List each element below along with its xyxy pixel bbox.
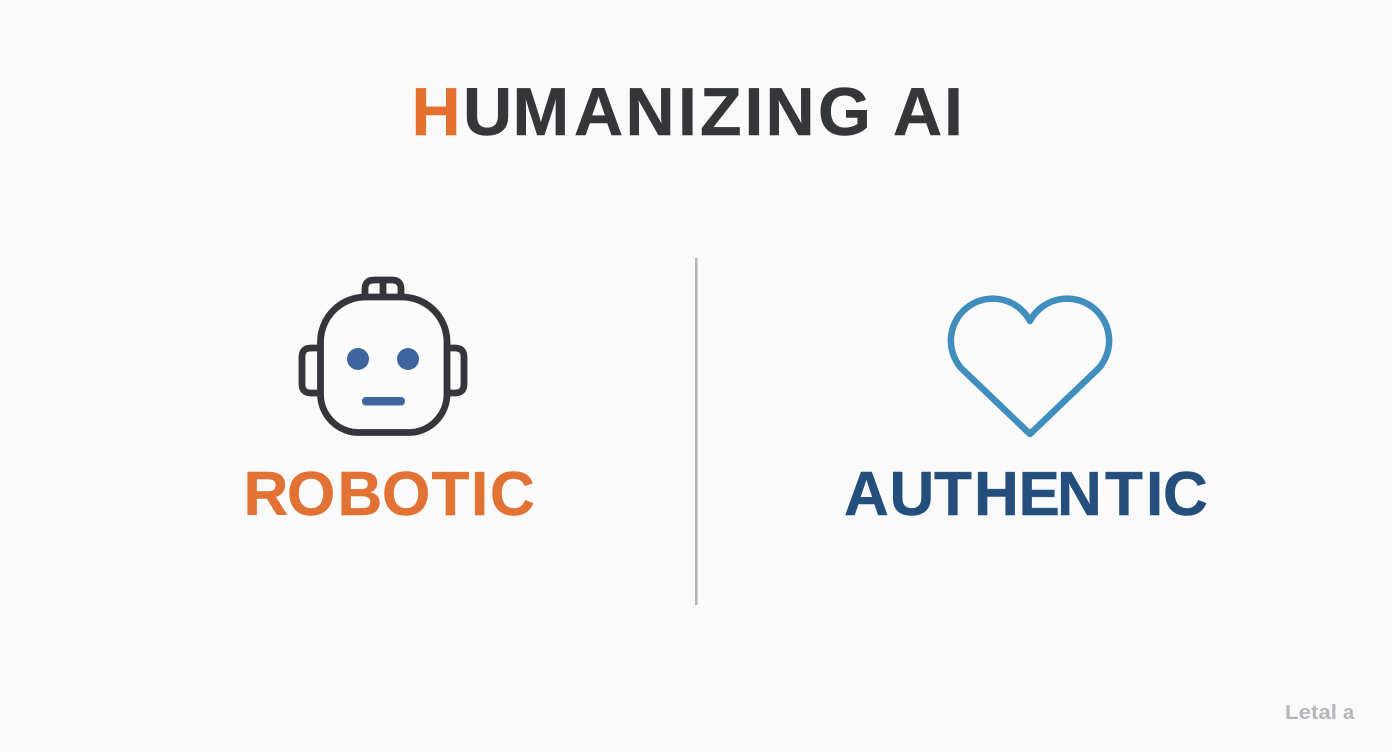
robot right eye (397, 348, 419, 370)
panel: authentic (844, 299, 1208, 529)
robot antenna (365, 280, 401, 297)
title: HUMANIZING AI (412, 74, 963, 150)
watermark (1285, 702, 1355, 724)
watermark: Letal (1285, 702, 1337, 724)
robot head (320, 297, 447, 432)
robot left eye (347, 348, 369, 370)
label: robotic: ROBOTIC (244, 460, 535, 529)
label: authentic: AUTHENTIC (844, 460, 1208, 529)
robot right ear (449, 348, 464, 393)
panel: robotic (244, 280, 535, 529)
robot mouth (362, 397, 405, 406)
robot left ear (302, 348, 318, 393)
icon: heart (951, 299, 1109, 434)
icon: robot (302, 280, 464, 432)
watermark: a (1343, 702, 1355, 724)
